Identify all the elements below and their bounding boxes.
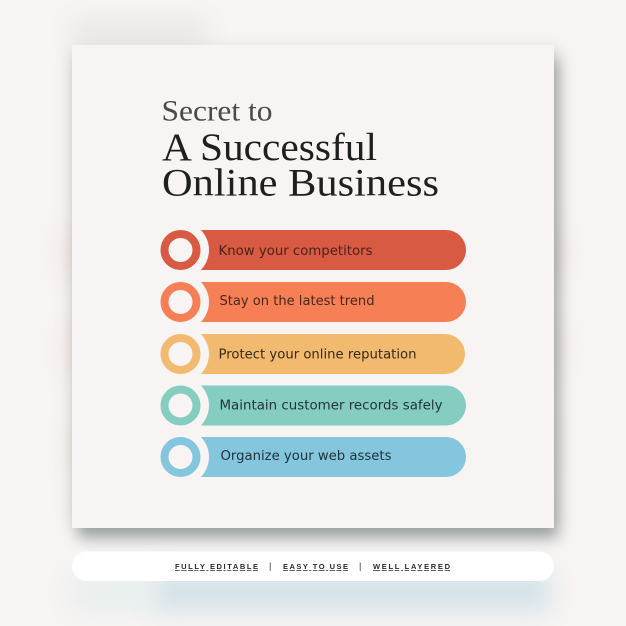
- list item 1: [164, 230, 466, 270]
- separator: |: [359, 561, 361, 571]
- list item 1: Know your competitors: [218, 244, 373, 259]
- heading: online business: Online Business: [162, 162, 439, 204]
- blurred background shapes: [66, 20, 560, 612]
- panel: main card: [72, 45, 554, 528]
- card shadow: [68, 45, 558, 538]
- list item 4: Maintain customer records safely: [220, 398, 443, 414]
- label: fully editable: FULLY EDITABLE: [175, 562, 258, 571]
- list item 2: Stay on the latest trend: [220, 294, 374, 309]
- heading: a successful: A Successful: [162, 126, 377, 169]
- separator: |: [269, 561, 271, 571]
- list item 3: Protect your online reputation: [218, 348, 416, 362]
- list item 3: [164, 334, 465, 374]
- list item 5: [164, 437, 466, 477]
- list item 5: Organize your web assets: [220, 449, 392, 464]
- footer pill: [72, 552, 554, 581]
- label: well layered: WELL LAYERED: [373, 562, 451, 571]
- list item 2: [164, 282, 466, 322]
- label: easy to use: EASY TO USE: [283, 562, 348, 571]
- heading: secret to: Secret to: [162, 94, 272, 128]
- list item 4: [164, 386, 466, 426]
- title: [162, 94, 439, 204]
